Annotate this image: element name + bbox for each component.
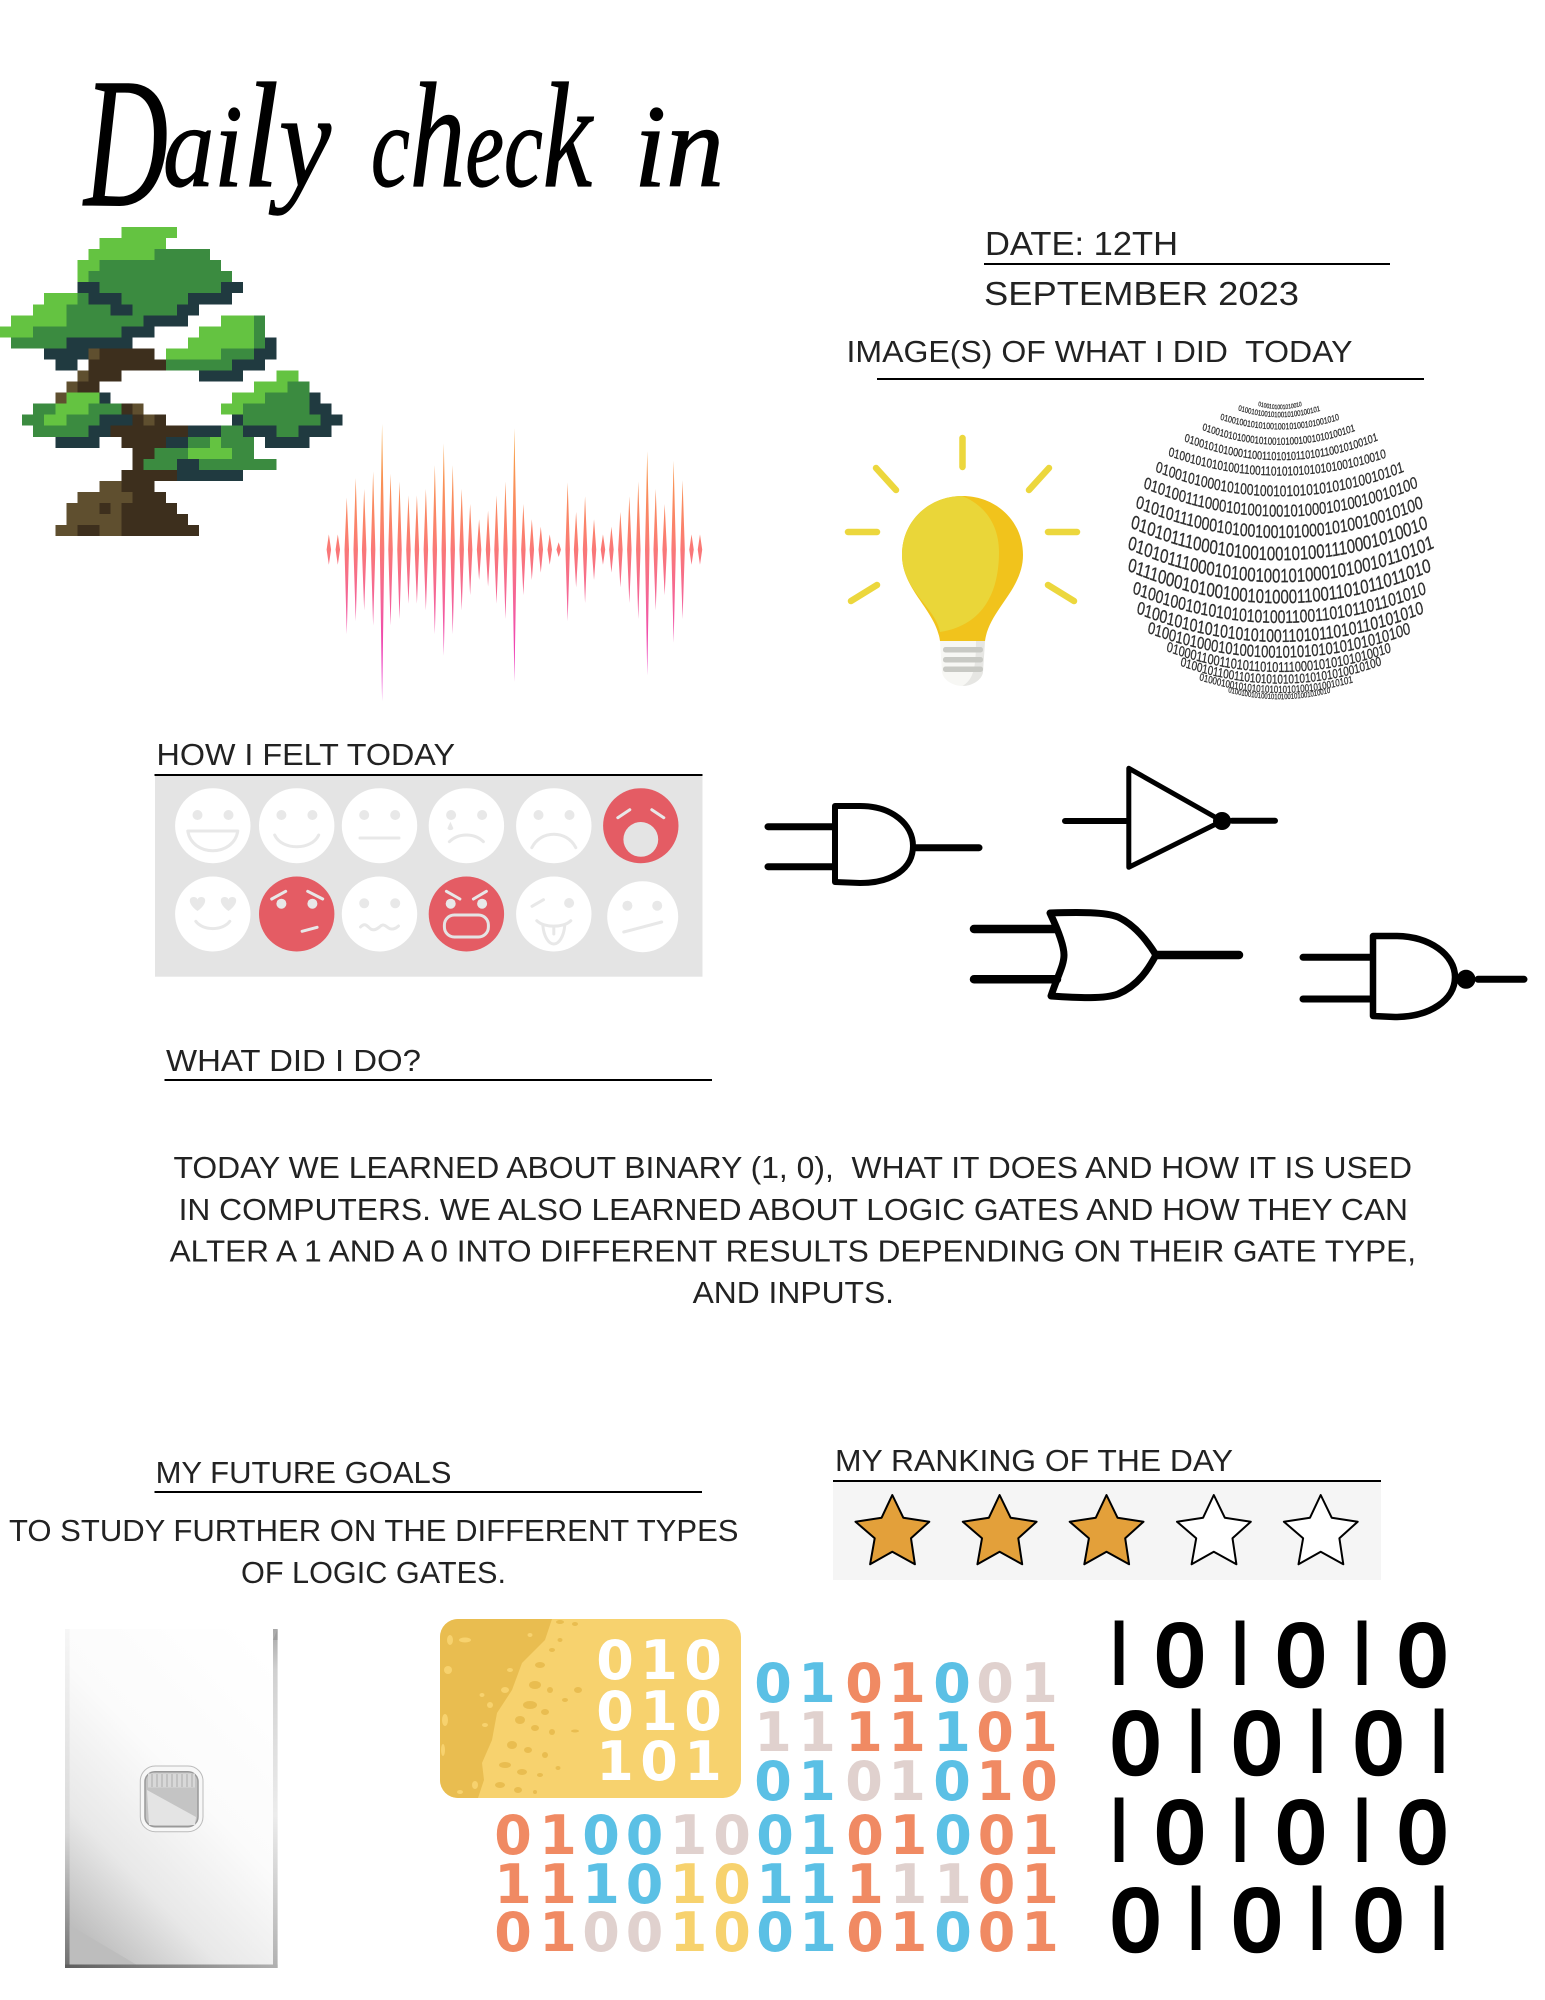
text block: future goals: TO STUDY FURTHER ON THE DIFFERENT TYPES <box>9 1514 738 1548</box>
text: coloured binary block lower: 1 <box>539 1901 577 1964</box>
heading: images of what I did today: IMAGE(S) OF WHAT I DID TODAY <box>846 335 1352 369</box>
face: smile <box>259 788 334 863</box>
text: black binary block: I <box>1349 1600 1375 1705</box>
text: coloured binary block lower: 1 <box>890 1804 927 1867</box>
text: coloured binary block upper: 0 <box>845 1750 883 1813</box>
text block: future goals: OF LOGIC GATES. <box>241 1556 506 1590</box>
text: coloured binary block lower: 1 <box>890 1901 927 1964</box>
heading: how I felt today: HOW I FELT TODAY <box>156 738 455 772</box>
text: coloured binary block upper: 0 <box>754 1652 792 1715</box>
text: coloured binary block upper: 0 <box>845 1652 883 1715</box>
heading: my future goals: MY FUTURE GOALS <box>156 1456 452 1490</box>
text: black binary block: 0 <box>1354 1872 1403 1969</box>
text: coloured binary block upper: 1 <box>798 1701 836 1764</box>
text block: what I did: ALTER A 1 AND A 0 INTO DIFFERENT RESULTS DEPENDING ON THEIR GATE TYPE, <box>170 1234 1416 1268</box>
text: black binary block <box>1106 1600 1452 1970</box>
panel: star rating <box>833 1482 1381 1580</box>
title: D <box>82 41 168 246</box>
text: coloured binary block lower: 0 <box>756 1901 794 1964</box>
text: coloured binary block lower: 0 <box>756 1804 794 1867</box>
card: yellow binary tile: 0 <box>640 1730 678 1793</box>
icon: light switch <box>65 1629 278 1968</box>
text: black binary block: 0 <box>1277 1784 1325 1881</box>
text: black binary block: I <box>1106 1777 1132 1882</box>
text: coloured binary block upper: 1 <box>1020 1701 1058 1764</box>
card: yellow binary tile: 1 <box>640 1629 678 1692</box>
text: coloured binary block lower: 0 <box>713 1853 751 1916</box>
icon: AND gate <box>768 806 979 883</box>
heading: what did I do: WHAT DID I DO? <box>166 1044 421 1078</box>
face: neutral <box>342 788 417 863</box>
text: black binary block: 0 <box>1156 1784 1204 1881</box>
icon: NOT gate <box>1065 768 1275 867</box>
text: coloured binary block lower: 0 <box>582 1901 620 1964</box>
card: yellow binary tile: 0 <box>596 1680 634 1743</box>
text: coloured binary block lower: 0 <box>934 1804 972 1867</box>
face: red angry <box>429 876 504 952</box>
text: black binary block: I <box>1426 1865 1452 1970</box>
icon: light bulb <box>848 438 1077 686</box>
face: unsure <box>607 881 678 952</box>
text: date: SEPTEMBER 2023 <box>984 275 1299 312</box>
text: coloured binary block lower: 1 <box>799 1901 837 1964</box>
star: empty 5 <box>1284 1495 1358 1564</box>
card: yellow binary tile: 1 <box>684 1730 722 1793</box>
face: heart eyes <box>175 876 250 952</box>
face: red yawning <box>603 788 678 863</box>
icon: binary globe: 01000100101010101010101001010010101 <box>1200 673 1353 694</box>
text block: what I did <box>170 1151 1416 1310</box>
text: black binary block: I <box>1349 1777 1375 1882</box>
card: yellow binary tile: 1 <box>596 1730 634 1793</box>
text: black binary block: 0 <box>1233 1872 1281 1969</box>
icon: binary globe: 0100101001010010100100101 <box>1238 405 1320 418</box>
text: coloured binary block upper: 1 <box>888 1701 926 1764</box>
text: black binary block: I <box>1426 1688 1452 1793</box>
text: coloured binary block upper: 1 <box>888 1652 926 1715</box>
face: sad <box>516 788 592 863</box>
text: coloured binary block lower: 0 <box>494 1901 532 1964</box>
text: coloured binary block upper: 1 <box>1020 1652 1058 1715</box>
icon: binary globe <box>1128 402 1434 700</box>
text: coloured binary block upper: 0 <box>754 1750 792 1813</box>
text: coloured binary block lower: 1 <box>756 1853 794 1916</box>
title: check <box>371 53 594 219</box>
icon: pixel bonsai tree <box>0 227 343 536</box>
text: black binary block: I <box>1304 1688 1330 1793</box>
text: coloured binary block lower: 0 <box>978 1804 1015 1867</box>
card: yellow binary tile: 0 <box>684 1680 722 1743</box>
star: filled 1 <box>856 1495 929 1564</box>
face: crying <box>429 788 504 863</box>
title <box>82 41 724 246</box>
text block: what I did: AND INPUTS. <box>693 1276 894 1310</box>
text: coloured binary block lower: 1 <box>934 1853 972 1916</box>
icon: binary globe: 0100101010100110011010101010101001010010 <box>1168 448 1386 476</box>
text: coloured binary block lower: 1 <box>799 1804 837 1867</box>
text: coloured binary block lower: 1 <box>539 1853 577 1916</box>
text: coloured binary block lower: 0 <box>626 1853 663 1916</box>
text: coloured binary block upper <box>754 1652 1058 1813</box>
text: coloured binary block lower <box>494 1804 1059 1964</box>
text: black binary block: I <box>1106 1600 1132 1705</box>
text: coloured binary block lower: 0 <box>978 1853 1015 1916</box>
text: coloured binary block lower: 0 <box>846 1804 884 1867</box>
card: yellow binary tile: 0 <box>596 1629 634 1692</box>
text: black binary block: 0 <box>1354 1695 1403 1792</box>
text: coloured binary block lower: 1 <box>539 1804 577 1867</box>
text: black binary block: 0 <box>1398 1607 1447 1704</box>
title: in <box>634 81 724 212</box>
text block: what I did: IN COMPUTERS. WE ALSO LEARNED ABOUT LOGIC GATES AND HOW THEY CAN <box>179 1193 1408 1227</box>
icon: binary globe: 01001010100010100101001001010100101 <box>1202 424 1356 446</box>
text: coloured binary block upper: 0 <box>976 1652 1014 1715</box>
star: filled 3 <box>1070 1495 1144 1564</box>
text: coloured binary block upper: 0 <box>933 1652 971 1715</box>
text: coloured binary block lower: 1 <box>494 1853 532 1916</box>
text: coloured binary block upper: 1 <box>976 1750 1014 1813</box>
text: coloured binary block upper: 0 <box>933 1750 971 1813</box>
text: black binary block: I <box>1304 1865 1330 1970</box>
face: queasy <box>342 876 417 952</box>
card: yellow binary tile: 0 <box>684 1629 722 1692</box>
icon: OR gate <box>974 912 1239 998</box>
card: yellow binary tile: 1 <box>640 1680 678 1743</box>
text: coloured binary block lower: 0 <box>494 1804 532 1867</box>
text: coloured binary block upper: 1 <box>933 1701 971 1764</box>
text: black binary block: I <box>1183 1688 1209 1793</box>
star: empty 4 <box>1177 1495 1251 1564</box>
text: coloured binary block upper: 1 <box>888 1750 926 1813</box>
text: black binary block: I <box>1227 1600 1253 1705</box>
icon: sound wave <box>327 424 702 701</box>
text: black binary block: 0 <box>1156 1607 1204 1704</box>
text: coloured binary block lower: 1 <box>670 1901 707 1964</box>
text: coloured binary block lower: 0 <box>713 1901 751 1964</box>
text block: what I did: TODAY WE LEARNED ABOUT BINARY (1, 0), WHAT IT DOES AND HOW IT IS USED <box>174 1151 1412 1185</box>
text: black binary block: 0 <box>1111 1695 1160 1792</box>
title: aily <box>163 53 331 219</box>
text: coloured binary block lower: 0 <box>626 1804 663 1867</box>
text: coloured binary block upper: 1 <box>798 1750 836 1813</box>
heading: my ranking of the day: MY RANKING OF THE DAY <box>835 1444 1233 1478</box>
text: black binary block: I <box>1183 1865 1209 1970</box>
face: big grin <box>175 788 250 863</box>
text: coloured binary block upper: 1 <box>845 1701 883 1764</box>
text: coloured binary block lower: 1 <box>1021 1804 1059 1867</box>
text: coloured binary block lower: 0 <box>582 1804 620 1867</box>
icon: NAND gate <box>1303 936 1524 1017</box>
text: coloured binary block upper: 1 <box>754 1701 792 1764</box>
text: coloured binary block lower: 0 <box>846 1901 884 1964</box>
text: date <box>984 225 1390 312</box>
text: black binary block: 0 <box>1277 1607 1325 1704</box>
text: coloured binary block upper: 1 <box>798 1652 836 1715</box>
panel: mood faces <box>155 776 702 977</box>
text: black binary block: 0 <box>1111 1872 1160 1969</box>
text: coloured binary block upper: 0 <box>976 1701 1014 1764</box>
text: coloured binary block lower: 0 <box>934 1901 972 1964</box>
card: yellow binary tile <box>440 1619 741 1798</box>
face: tongue out <box>516 876 592 952</box>
text: coloured binary block lower: 1 <box>846 1853 884 1916</box>
text: date: DATE: 12TH <box>985 225 1178 262</box>
text: coloured binary block lower: 1 <box>890 1853 927 1916</box>
icon: binary globe: 0100101001010010 <box>1258 402 1302 410</box>
text: black binary block: 0 <box>1398 1784 1447 1881</box>
text: coloured binary block lower: 1 <box>1021 1901 1059 1964</box>
face: red worried <box>259 876 334 952</box>
text: coloured binary block lower: 0 <box>713 1804 751 1867</box>
text: coloured binary block lower: 1 <box>670 1804 707 1867</box>
text: black binary block: I <box>1227 1777 1253 1882</box>
text block: future goals <box>9 1514 738 1590</box>
text: coloured binary block lower: 0 <box>626 1901 663 1964</box>
star: filled 2 <box>963 1495 1037 1564</box>
text: coloured binary block lower: 1 <box>670 1853 707 1916</box>
text: coloured binary block lower: 1 <box>799 1853 837 1916</box>
text: coloured binary block lower: 1 <box>1021 1853 1059 1916</box>
text: coloured binary block lower: 0 <box>978 1901 1015 1964</box>
text: coloured binary block upper: 0 <box>1020 1750 1058 1813</box>
text: black binary block: 0 <box>1233 1695 1281 1792</box>
text: coloured binary block lower: 1 <box>582 1853 620 1916</box>
